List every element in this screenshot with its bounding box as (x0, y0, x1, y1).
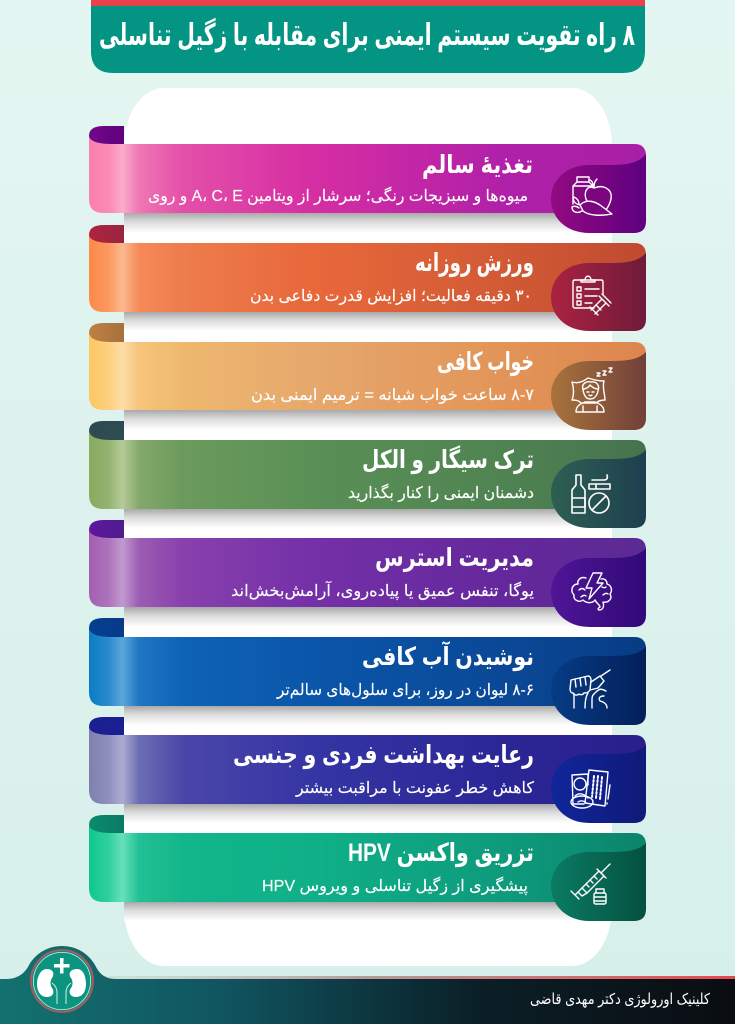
ribbon 1: healthy food (89, 126, 646, 233)
ribbon 2: daily exercise (89, 225, 646, 331)
description: یوگا، تنفس عمیق یا پیاده‌روی، آرامش‌بخش‌اند (231, 581, 534, 601)
icon: milk, apple and carrot (572, 177, 612, 215)
description: ۸-۶ لیوان در روز، برای سلول‌های سالم‌تر (276, 682, 534, 700)
heading: تغذیهٔ سالم (422, 151, 533, 179)
ribbon 5: stress management (89, 520, 646, 627)
description: کاهش خطر عفونت با مراقبت بیشتر (295, 780, 534, 798)
heading: رعایت بهداشت فردی و جنسی (233, 741, 534, 770)
icon: checklist and dumbbell (573, 276, 611, 315)
description: پیشگیری از زگیل تناسلی و ویروس HPV (262, 876, 528, 896)
icon: bottle and cigarette prohibited (572, 475, 610, 513)
heading: ترک سیگار و الکل (362, 445, 534, 475)
icon: sleeping person (572, 368, 612, 412)
icon: brain with lightning (572, 573, 611, 610)
description: ۸-۷ ساعت خواب شبانه = ترمیم ایمنی بدن (251, 387, 534, 405)
icon: syringe and vial (571, 864, 610, 904)
description: دشمنان ایمنی را کنار بگذارید (348, 483, 534, 503)
ribbon 4: quit smoking and alcohol (89, 421, 646, 528)
heading: ورزش روزانه (415, 249, 534, 278)
clinic name: کلینیک اورولوژی دکتر مهدی قاضی (530, 991, 711, 1008)
ribbon 7: personal and sexual hygiene (89, 717, 646, 823)
ribbon 6: drink enough water (89, 618, 646, 725)
logo: kidneys and plus (31, 950, 93, 1012)
description: ۳۰ دقیقه فعالیت؛ افزایش قدرت دفاعی بدن (250, 288, 532, 306)
footer bar (0, 946, 735, 1024)
ribbon 3: enough sleep (89, 323, 646, 430)
heading: خواب کافی (437, 348, 534, 377)
icon: hygiene pack and tablets (571, 770, 610, 808)
description: میوه‌ها و سبزیجات رنگی؛ سرشار از ویتامین A، C، E و روی (148, 186, 528, 206)
ribbon 8: HPV vaccine (89, 815, 646, 921)
icon: hand holding a glass (570, 670, 610, 708)
heading: تزریق واکسن HPV (348, 839, 534, 868)
header banner (91, 0, 645, 73)
white center panel (124, 88, 612, 966)
heading: نوشیدن آب کافی (362, 641, 534, 672)
heading: مدیریت استرس (375, 544, 534, 573)
